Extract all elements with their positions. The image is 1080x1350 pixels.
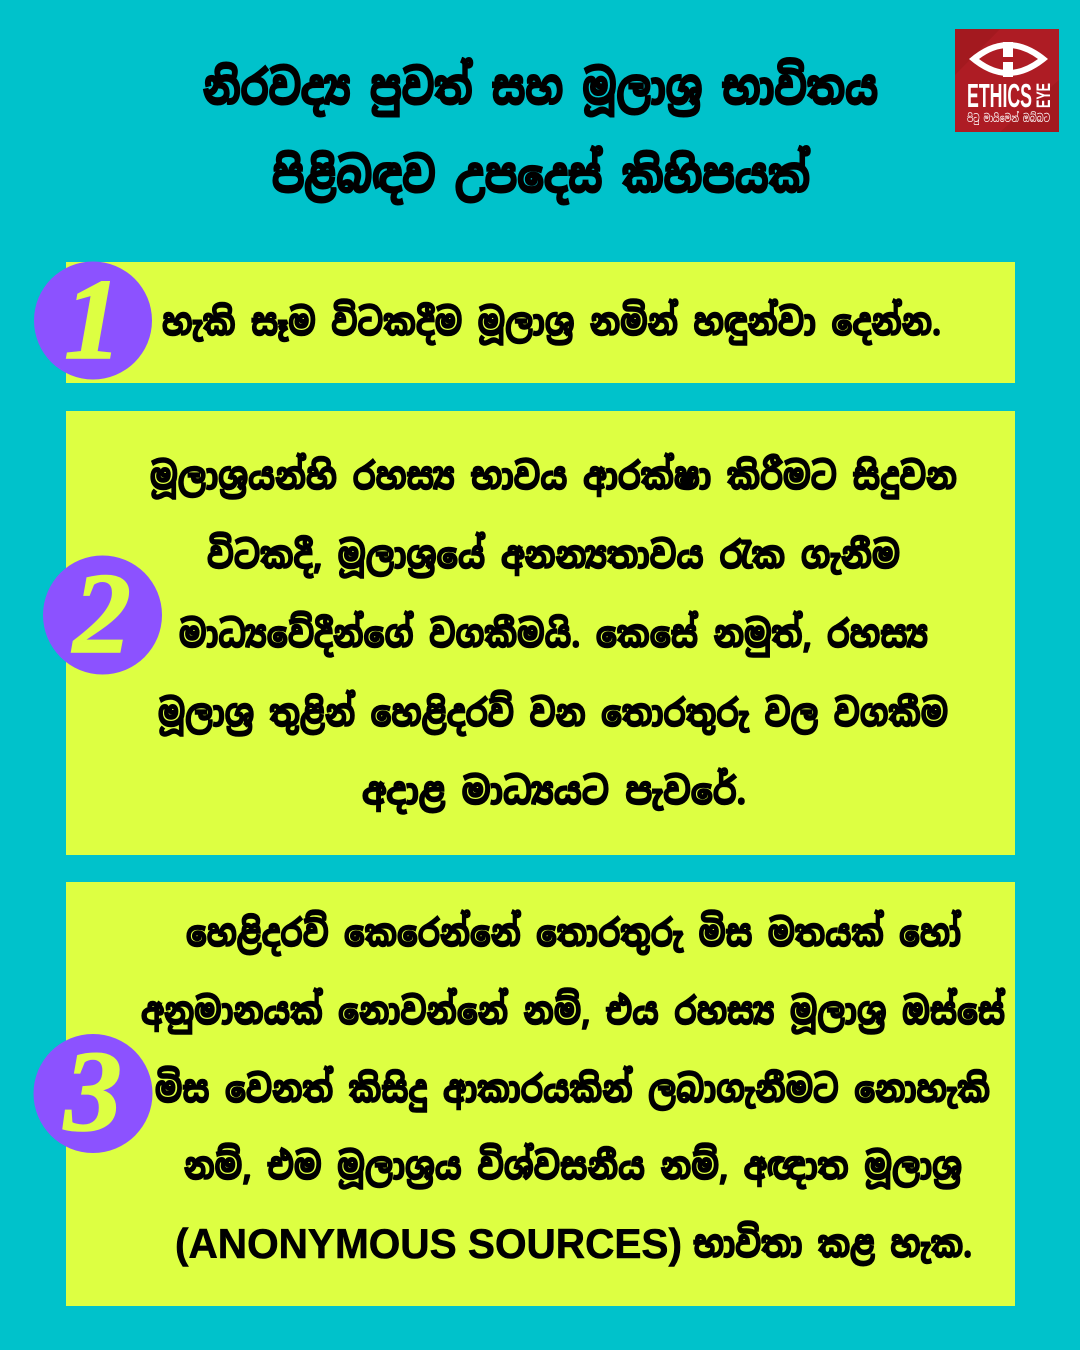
tip 2 text	[150, 452, 957, 815]
logo: Ethics Eye	[955, 29, 1059, 132]
logo wordmark EYE: EYE	[1034, 83, 1055, 108]
title line 1: නිරවද්‍ය පුවත් සහ මූලාශ්‍ර භාවිතය	[203, 56, 878, 118]
number badge 2	[43, 550, 162, 678]
number badge 2: 2	[71, 550, 131, 678]
logo tagline: පිටු මායිමෙන් ඔබ්බට	[967, 111, 1050, 126]
panel 1	[34, 256, 1015, 384]
tip 3 text: භාවිතා කළ හැක.	[693, 1220, 972, 1268]
title line 2: පිළිබඳව උපදෙස් කිහිපයක්	[272, 144, 811, 206]
icon: eye	[969, 42, 1048, 77]
tip 2 text: මාධ්‍යවේදීන්ගේ වගකීමයි. කෙසේ නමුත්, රහස්‍ය	[179, 610, 928, 658]
panel 2	[43, 411, 1015, 855]
tip 2 text: විටකදී, මූලාශ්‍රයේ අනන්‍යතාවය රැක ගැනීම	[207, 531, 900, 579]
tip 2 text: මූලාශ්‍රයන්හි රහස්‍ය භාවය ආරක්ෂා කිරීමට සිදුවන	[150, 452, 957, 500]
number badge 3	[34, 1028, 152, 1156]
tip 3 text: නම්, එම මූලාශ්‍රය විශ්වසනීය නම්, අඥාත මූලාශ්‍ර	[184, 1142, 962, 1190]
number badge 1: 1	[64, 256, 122, 384]
tip 2 text: අදාළ මාධ්‍යයට පැවරේ.	[362, 767, 746, 815]
tip 2 text: මූලාශ්‍ර තුළින් හෙළිදරව් වන තොරතුරු වල වගකීම	[158, 689, 948, 737]
tip 3 text: (ANONYMOUS SOURCES)	[175, 1220, 682, 1267]
number badge 3: 3	[63, 1028, 122, 1156]
tip 1 text: හැකි සෑම විටකදීම මූලාශ්‍ර නමින් හඳුන්වා දෙන්න.	[162, 298, 941, 346]
tip 3 text	[141, 909, 1006, 1268]
panel 3	[34, 882, 1015, 1306]
number badge 1	[34, 256, 152, 384]
title	[203, 56, 878, 206]
